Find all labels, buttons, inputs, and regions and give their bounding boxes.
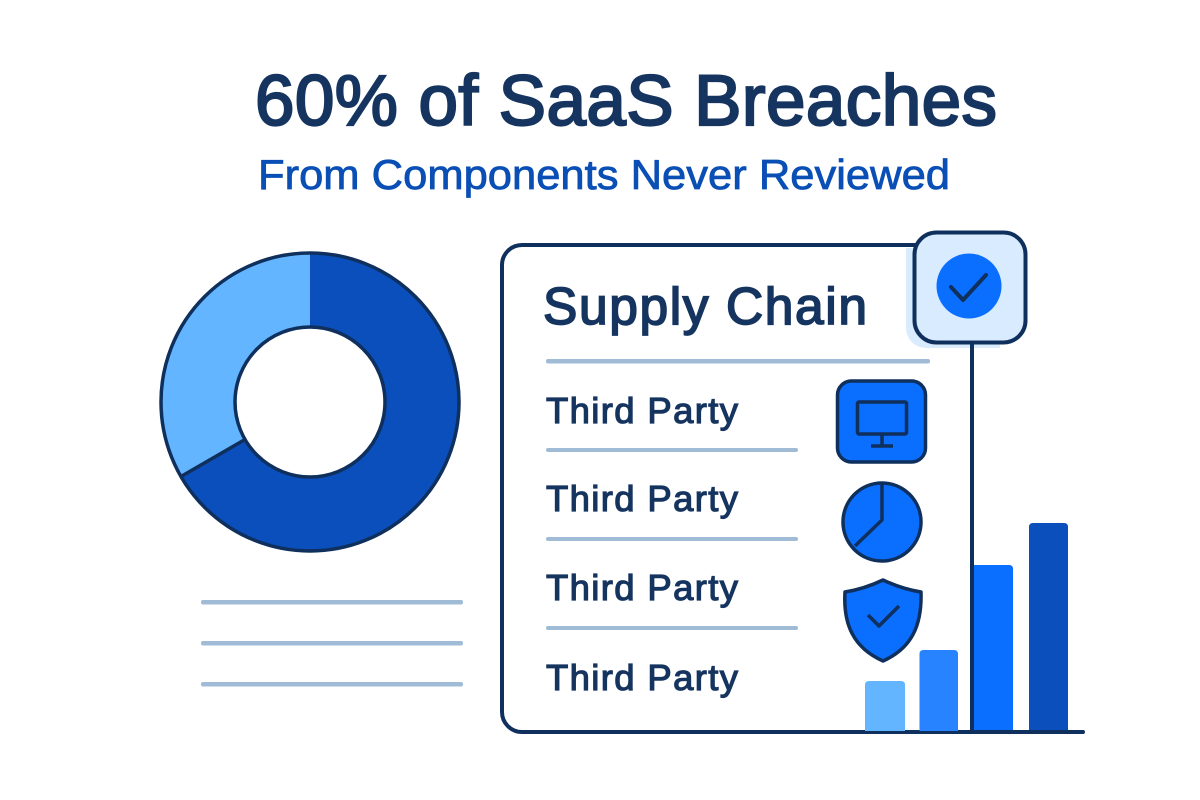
panel: supply chain card [502,245,972,732]
row 1 label: Third Party [546,390,739,431]
bar 3 [972,565,1013,731]
badge check [951,275,986,300]
badge shadow [906,248,1000,348]
donut segment: light [161,253,310,476]
icon: check badge [914,232,1026,342]
badge box [914,232,1026,342]
bar 1 [865,681,905,731]
icon: clock [843,483,921,561]
donut outline [161,253,459,551]
card heading: Supply Chain [543,277,867,335]
legend placeholder lines [201,600,463,686]
row 4 label: Third Party [546,657,739,698]
bar 2 [920,650,958,731]
row 2 label: Third Party [546,478,739,519]
heading divider [546,359,930,364]
donut chart [161,253,459,551]
row 3 label: Third Party [546,567,739,608]
chart axis [972,342,1083,732]
title: 60% of SaaS Breaches [255,62,997,141]
bar chart [865,342,1083,732]
icon: monitor [838,381,926,462]
icon: shield [845,580,921,661]
subtitle: From Components Never Reviewed [258,151,950,198]
bar 4 [1029,523,1068,731]
donut segment: 60% dark [181,253,459,551]
card outline [502,245,972,732]
badge circle [936,254,1002,318]
